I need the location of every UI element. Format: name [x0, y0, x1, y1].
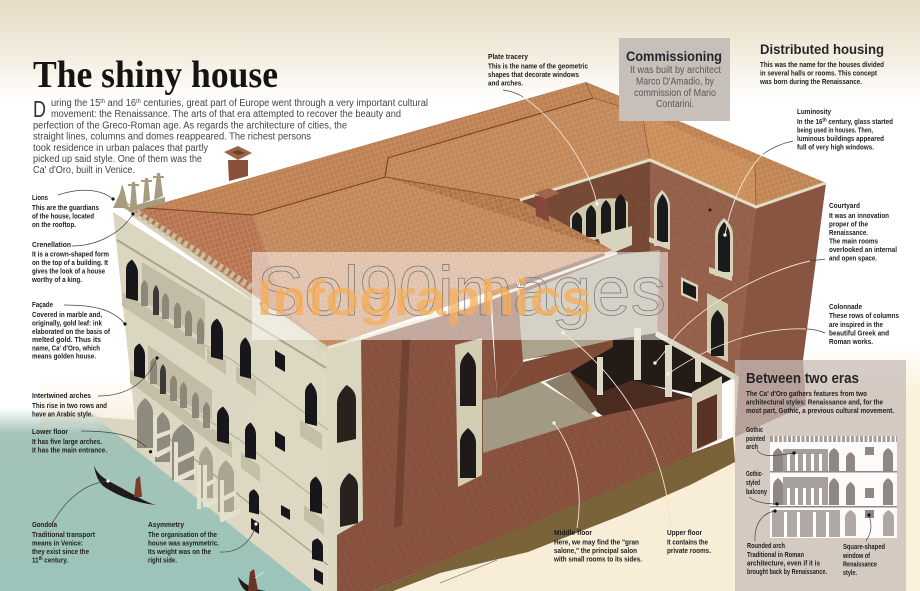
pointer: gothic-styled balcony: styled — [746, 478, 760, 487]
panel: commissioning: Commissioning — [626, 48, 722, 64]
callout: lower floor: It has the main entrance. — [32, 446, 107, 454]
facade details — [117, 240, 358, 585]
chimney on the main roof — [224, 146, 252, 181]
watermark: Infographics — [257, 270, 592, 326]
callout: facade: originally, gold leaf: ink — [32, 318, 103, 328]
callout: lions — [32, 190, 115, 229]
callout: luminosity: In the 16 — [797, 117, 827, 126]
callout: plate tracery: shapes that decorate windows — [488, 70, 579, 79]
lower floor arches — [137, 398, 234, 512]
intro text: took residence in urban palaces that partly — [33, 143, 208, 154]
roof — [133, 82, 826, 349]
pointer: square-shaped window — [842, 513, 885, 577]
pointer: rounded arch: brought back by Renaissance. — [747, 567, 827, 576]
callout: lions: This are the guardians — [32, 203, 99, 212]
pointer: gothic pointed arch: pointed — [746, 434, 765, 443]
callout: asymmetry: house was asymmetric. — [148, 538, 219, 548]
panel: commissioning: Contarini. — [656, 99, 694, 110]
callout: middle floor: with small rooms to its sides. — [553, 554, 642, 564]
title: The shiny house — [33, 54, 278, 96]
tall upper windows — [126, 258, 358, 585]
panel intro text: most part, Gothic, a previous cultural movement. — [746, 406, 894, 415]
intro text: uring the 15 — [51, 98, 104, 109]
callout: gondola: 11 — [32, 556, 40, 564]
callout: middle floor — [552, 421, 642, 564]
panel heading: Between two eras — [746, 370, 859, 387]
lions on the rooftop — [113, 173, 165, 212]
callout: crenellation: Crenellation — [32, 240, 71, 249]
building: front brick wall — [337, 258, 735, 591]
callout: crenellation: It is a crown-shaped form — [32, 250, 109, 258]
callout: crenellation: gives the look of a house — [32, 266, 105, 276]
facade corner strip — [326, 335, 363, 591]
panel: commissioning: Marco D'Amadio, by — [636, 76, 714, 88]
pointer: gothic-styled balcony: Gothic- — [746, 469, 763, 478]
callout: courtyard: and open space. — [829, 254, 877, 262]
callout: intertwined arches: Intertwined arches — [32, 391, 91, 400]
colonnade — [597, 328, 737, 397]
pointer: square-shaped window: Square-shaped — [843, 542, 885, 551]
callout: gondola: Gondola — [32, 520, 58, 529]
brick wall windows — [455, 338, 482, 487]
intro text: th — [100, 99, 105, 105]
courtyard windows — [570, 190, 733, 362]
text block: distributed housing: was born during the Renaissance. — [759, 77, 862, 86]
text block: distributed housing: Distributed housing — [760, 41, 884, 57]
callout: plate tracery: Plate tracery — [488, 52, 529, 61]
callout: luminosity: full of very high windows. — [797, 142, 874, 152]
callout: intertwined arches: This rise in two rows and — [32, 401, 107, 410]
door in the garden wall — [692, 376, 722, 453]
callout: upper floor: It contains the — [667, 538, 708, 546]
callout: colonnade: Roman works. — [829, 337, 873, 346]
panel intro text — [746, 389, 894, 415]
callout: luminosity: Luminosity — [797, 107, 832, 116]
callout: luminosity: century, glass started — [827, 117, 893, 126]
callout: middle floor: Middle floor — [554, 528, 592, 537]
gondola — [94, 465, 156, 505]
ground strip under the house — [373, 437, 735, 591]
callout: asymmetry: Asymmetry — [148, 520, 185, 529]
pointer: gothic-styled balcony — [746, 469, 779, 506]
callout: luminosity: being used in houses. Then, — [797, 126, 873, 134]
callout: lower floor — [32, 427, 152, 454]
pointer: rounded arch: architecture, even if it is — [747, 558, 820, 568]
callout: intertwined arches — [32, 356, 159, 418]
balconies — [122, 292, 324, 535]
elevation drawing of the facade — [770, 436, 897, 538]
callout: upper floor: Upper floor — [667, 528, 702, 537]
callout: gondola: they exist since the — [32, 547, 89, 556]
ground pointer line — [440, 560, 497, 583]
callout: intertwined arches: have an Arabic style. — [32, 410, 93, 418]
callout: crenellation — [31, 212, 135, 284]
crenellation along the cornice — [125, 205, 254, 289]
callout: colonnade — [666, 302, 899, 376]
callout: asymmetry: right side. — [148, 556, 177, 564]
pointer: square-shaped window: Renaissance — [843, 560, 877, 568]
text block: distributed housing: in several halls or rooms. This concept — [760, 68, 877, 78]
water of the canal — [0, 408, 313, 591]
pointer: gothic pointed arch: Gothic — [746, 425, 763, 434]
callout: luminosity — [723, 107, 893, 237]
callout: facade: melted gold. Thus its — [32, 335, 101, 344]
callout: facade: elaborated on the basis of — [32, 327, 110, 336]
callout: courtyard — [653, 201, 897, 365]
callout: gondola: th — [39, 556, 43, 562]
pointer: rounded arch: Rounded arch — [747, 541, 785, 550]
watermark: Sol90images — [257, 252, 666, 330]
callout: plate tracery — [488, 52, 599, 206]
chimney in the courtyard — [534, 188, 560, 222]
callout: lower floor: It has five large arches. — [32, 437, 102, 446]
panel: commissioning — [619, 38, 730, 121]
callout: colonnade: These rows of columns — [829, 311, 899, 320]
building: courtyard walls — [483, 160, 826, 453]
callout: courtyard: The main rooms — [829, 236, 878, 246]
callout: upper floor: private rooms. — [667, 546, 711, 555]
pointer: rounded arch: Traditional in Roman — [747, 550, 804, 559]
intro text: picked up said style. One of them was the — [33, 154, 202, 165]
pointer: gothic pointed arch: arch — [746, 442, 758, 451]
intro text: and 16 — [105, 98, 136, 109]
intro text: D — [33, 96, 46, 122]
pointer: square-shaped window: window of — [842, 551, 870, 560]
callout: facade — [32, 300, 127, 360]
intro text: perfection of the Greco-Roman age. As regards the architecture of cities, the — [33, 120, 347, 132]
callout: upper floor — [561, 331, 711, 555]
callout: plate tracery: This is the name of the geometric — [488, 62, 588, 70]
panel: commissioning: commission of Mario — [634, 88, 716, 99]
callout: courtyard: Renaissance. — [829, 228, 868, 237]
pointer: rounded arch — [747, 509, 827, 576]
callout: facade: name, Ca' d'Oro, which — [32, 344, 100, 352]
text block: distributed housing: This was the name for the houses divided — [760, 60, 884, 69]
callout: middle floor: Here, we may find the "gran — [554, 538, 639, 546]
callout: lions: Lions — [32, 193, 48, 202]
callout: luminosity: th — [823, 118, 827, 124]
panel: between two eras — [735, 360, 906, 591]
callout: facade: Covered in marble and, — [32, 310, 102, 319]
panel intro text: architectural styles: Renaissance and, for the — [746, 398, 883, 406]
intro text: straight lines, columns and domes reappeared. The richest persons — [33, 132, 311, 142]
intro text: th — [136, 99, 141, 105]
callout: courtyard: overlooked an internal — [829, 245, 897, 254]
second gondola — [238, 569, 266, 591]
callout: gondola: means in Venice: — [32, 538, 83, 548]
callout: colonnade: are inspired in the — [829, 320, 883, 329]
pointer: gothic-styled balcony: balcony — [746, 487, 768, 496]
callout: asymmetry: The organisation of the — [148, 530, 217, 539]
callout: colonnade: Colonnade — [829, 302, 862, 311]
pointer: gothic pointed arch — [746, 425, 796, 456]
intro text: Ca' d'Oro, built in Venice. — [33, 165, 135, 176]
callout: asymmetry — [148, 520, 258, 564]
callout: gondola: century. — [43, 556, 68, 564]
callout: lions: on the rooftop. — [32, 220, 76, 229]
callout: courtyard: proper of the — [829, 220, 868, 228]
callout: gondola: Traditional transport — [32, 530, 95, 539]
callout: facade: means golden house. — [32, 352, 96, 360]
pointer: square-shaped window: style. — [843, 568, 857, 577]
callout: plate tracery: and arches. — [488, 78, 523, 88]
callout: asymmetry: Its weight was on the — [148, 547, 211, 556]
callout: lions: of the house, located — [32, 212, 94, 220]
callout: luminosity: luminous buildings appeared — [797, 134, 884, 143]
panel: commissioning: It was built by architect — [630, 65, 721, 76]
callout: colonnade: beautiful Greek and — [829, 328, 889, 338]
callout: crenellation: worthy of a king. — [31, 275, 82, 284]
callout: lower floor: Lower floor — [32, 427, 68, 436]
callout: courtyard: Courtyard — [829, 201, 860, 210]
callout: middle floor: salone," the principal salon — [554, 546, 637, 555]
intro text: movement: the Renaissance. The arts of that era attempted to recover the beauty and — [51, 109, 401, 120]
intro text — [33, 96, 428, 176]
panel intro text: The Ca' d'Oro gathers features from two — [746, 389, 867, 398]
facade — [95, 212, 328, 591]
upper arcade — [141, 280, 210, 428]
callout: crenellation: on the top of a building. It — [32, 258, 108, 267]
intro text: centuries, great part of Europe went through a very important cultural — [141, 98, 428, 109]
callout: facade: Façade — [32, 300, 53, 309]
text block: distributed housing — [759, 41, 884, 86]
callout: gondola — [32, 479, 110, 564]
callout: courtyard: It was an innovation — [829, 211, 889, 220]
